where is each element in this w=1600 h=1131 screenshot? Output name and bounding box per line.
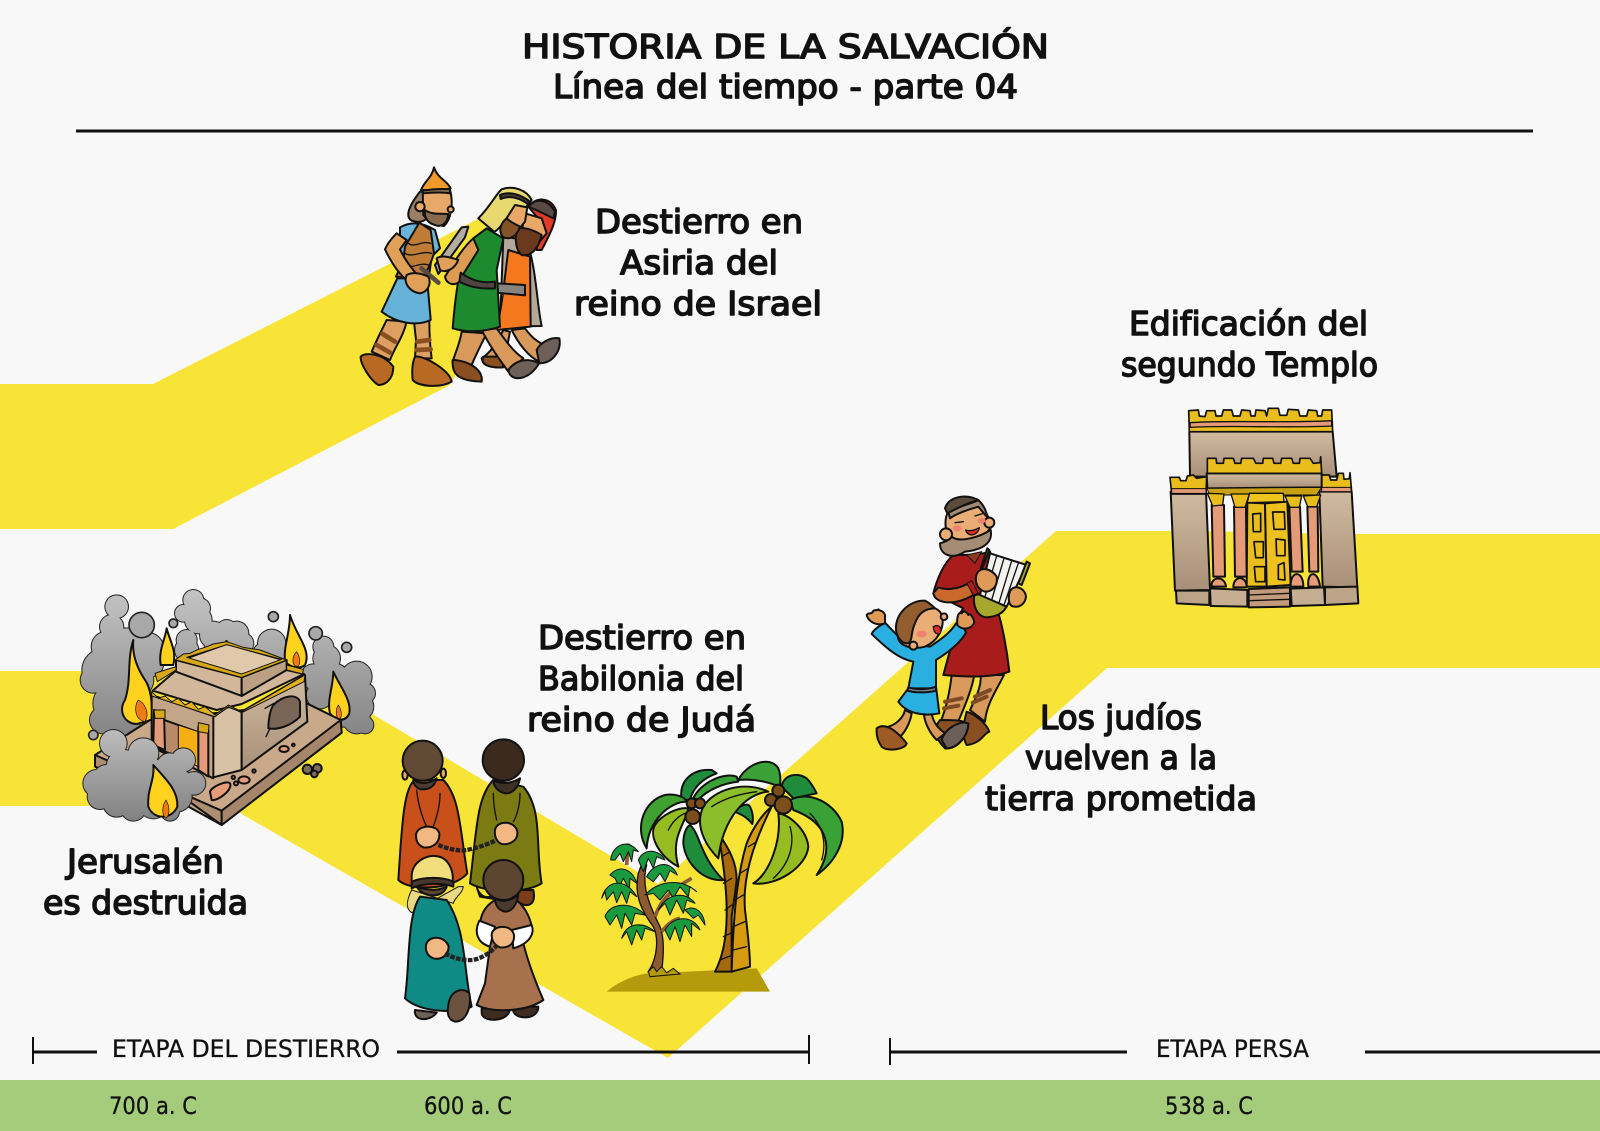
label: Jerusalén es destruida: es destruida [43, 883, 248, 922]
captive in green [445, 188, 539, 382]
ground [607, 968, 770, 992]
label: Los judíos vuelven: Los judíos [1040, 698, 1202, 737]
timeline: etapa persa: ETAPA PERSA [1156, 1035, 1310, 1063]
timeline: etapa persa [889, 1035, 1600, 1065]
branches [637, 860, 663, 972]
small tree [602, 843, 705, 977]
captive teal robe [405, 856, 472, 1022]
steps [1249, 587, 1290, 607]
label: Destierro en Asiria: Asiria del [620, 243, 778, 282]
man [933, 497, 1030, 748]
temple building [152, 642, 307, 778]
label: Destierro en Babilonia [527, 618, 756, 739]
date: 600 a. C: 600 a. C [424, 1092, 512, 1120]
label: Destierro en Babilonia: Babilonia del [538, 659, 744, 698]
smoke front [82, 729, 206, 822]
coconuts [685, 785, 792, 824]
title: Línea del tiempo - parte 04 [553, 67, 1018, 106]
illustration: returning man and child [867, 497, 1030, 750]
captive olive robe [470, 739, 542, 905]
side wings [1171, 492, 1210, 591]
illustration: chained captives [398, 739, 543, 1022]
rubble [210, 744, 322, 800]
platform [95, 703, 342, 825]
bases [1176, 591, 1209, 605]
soldier [361, 167, 468, 386]
illustration: palm trees of Babylon [602, 762, 843, 992]
label: Destierro en Asiria [574, 202, 822, 323]
captive red-orange robe [398, 741, 467, 888]
lower roof [153, 670, 304, 710]
trunks [715, 807, 772, 972]
columns [1212, 505, 1225, 577]
front flame [148, 765, 177, 818]
label: Edificación del segundo Templo: segundo Templo [1121, 345, 1378, 384]
door [1247, 503, 1267, 587]
yellow path: Israel exile band [0, 216, 500, 529]
label: Destierro en Babilonia: Destierro en [538, 618, 746, 657]
back flames [122, 615, 350, 724]
back leaves [681, 762, 817, 824]
portico [1207, 473, 1322, 488]
captive brown robe [477, 860, 543, 1020]
chain [438, 841, 495, 850]
label: Los judíos vuelven: tierra prometida [985, 779, 1257, 818]
illustration: second temple [1170, 408, 1358, 607]
date: 700 a. C: 700 a. C [109, 1092, 197, 1120]
timeline: etapa del destierro: ETAPA DEL DESTIERRO [112, 1035, 380, 1063]
timeline: etapa del destierro [32, 1035, 810, 1064]
captive in orange [482, 200, 560, 367]
yellow path: Judah exile and return band [0, 531, 1600, 1058]
label: Edificación del segundo Templo: Edificación del [1129, 304, 1368, 343]
label: Destierro en Asiria: Destierro en [595, 202, 803, 241]
illustration: burning temple of Jerusalem [80, 589, 376, 825]
title [522, 26, 1049, 106]
label: Edificación del segundo Templo [1121, 304, 1378, 384]
chain lower [445, 945, 497, 960]
label: Jerusalén es destruida [43, 842, 248, 922]
child [867, 601, 974, 750]
label: Destierro en Babilonia: reino de Judá [527, 700, 756, 739]
rear block [1189, 432, 1337, 477]
date: 538 a. C: 538 a. C [1165, 1092, 1253, 1120]
smoke back [80, 589, 376, 744]
label: Los judíos vuelven: vuelven a la [1025, 738, 1217, 777]
title: HISTORIA DE LA SALVACIÓN [522, 26, 1049, 66]
front leaves [641, 787, 843, 884]
upper block [176, 660, 242, 696]
label: Destierro en Asiria: reino de Israel [574, 284, 822, 323]
label: Los judíos vuelven [985, 698, 1257, 818]
label: Jerusalén es destruida: Jerusalén [65, 842, 224, 881]
timeline bar: green [0, 1080, 1600, 1131]
illustration: soldier leading captives [361, 167, 560, 386]
